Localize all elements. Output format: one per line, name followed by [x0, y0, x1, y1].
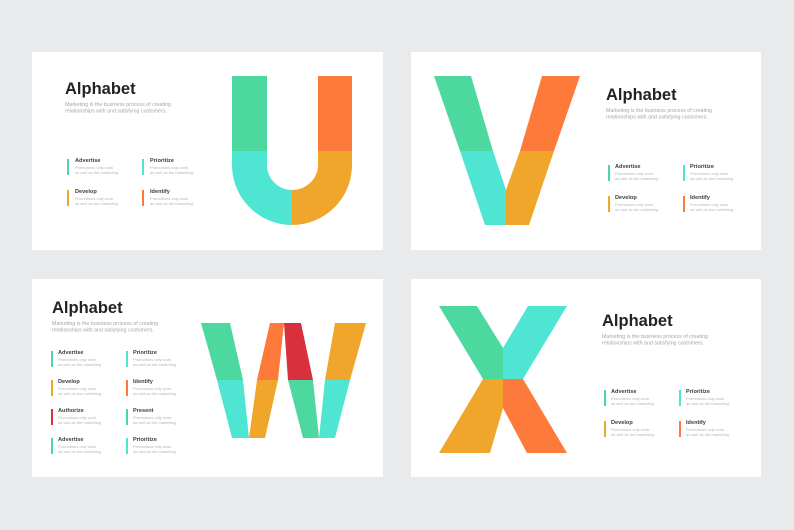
item: Identify: as well as the marketing.	[686, 432, 730, 437]
item: Develop: as well as the marketing.	[611, 432, 655, 437]
item: Prioritize	[142, 158, 194, 175]
item: Advertise: Promotions only work	[615, 171, 653, 176]
letter W	[201, 323, 366, 438]
subtitle: Marketing is the business process of creating	[602, 334, 708, 340]
item: Advertise	[67, 158, 119, 175]
item: Authorize: Authorize	[58, 408, 84, 414]
item: Identify	[142, 189, 194, 206]
item: Prioritize: Promotions only work	[133, 357, 171, 362]
subtitle: Marketing is the business process of creating	[65, 102, 171, 108]
item: Identify: Promotions only work	[133, 386, 171, 391]
item: Authorize	[51, 408, 102, 425]
item: Develop	[604, 420, 655, 437]
item: Develop: Promotions only work	[58, 386, 96, 391]
panel: X slide	[411, 279, 761, 477]
title: Alphabet	[602, 312, 673, 330]
item: Prioritize: as well as the marketing.	[150, 170, 194, 175]
subtitle: relationships with and satisfying customers.	[52, 328, 154, 334]
item: Prioritize: Promotions only work	[150, 165, 188, 170]
item: Present: as well as the marketing.	[133, 420, 177, 425]
subtitle: Marketing is the business process of creating	[52, 321, 158, 327]
item: Identify: Promotions only work	[686, 427, 724, 432]
item: Present	[126, 408, 177, 425]
item: Present: Present	[133, 408, 154, 414]
title: Alphabet	[52, 299, 123, 317]
item: Prioritize: as well as the marketing.	[690, 176, 734, 181]
item: Advertise: Advertise	[611, 389, 636, 395]
item: Develop: Develop	[58, 379, 80, 385]
letter V	[434, 76, 580, 225]
item: Advertise 2	[51, 437, 102, 454]
panel: U slide	[32, 52, 383, 250]
item: Prioritize 2: Prioritize	[133, 437, 157, 443]
item: Prioritize	[679, 389, 730, 406]
item: Develop: Develop	[611, 420, 633, 426]
item: Prioritize: Prioritize	[690, 164, 714, 170]
title: Alphabet	[65, 80, 136, 98]
title: Alphabet	[606, 86, 677, 104]
item: Advertise: Promotions only work	[75, 165, 113, 170]
item: Advertise: Advertise	[615, 164, 640, 170]
subtitle: relationships with and satisfying customers.	[606, 114, 708, 120]
item: Advertise: as well as the marketing.	[615, 176, 659, 181]
item: Identify	[126, 379, 177, 396]
item: Advertise 2: as well as the marketing.	[58, 449, 102, 454]
item: Develop: as well as the marketing.	[58, 391, 102, 396]
item: Advertise: as well as the marketing.	[611, 401, 655, 406]
item: Prioritize: Prioritize	[133, 350, 157, 356]
item: Develop: Develop	[615, 195, 637, 201]
item: Prioritize: Promotions only work	[690, 171, 728, 176]
item: Identify: as well as the marketing.	[690, 207, 734, 212]
item: Identify: Identify	[686, 420, 707, 426]
item: Develop	[608, 195, 659, 212]
item: Identify	[683, 195, 734, 212]
item: Prioritize	[683, 164, 734, 181]
item: Develop: as well as the marketing.	[615, 207, 659, 212]
letter X	[439, 306, 567, 453]
item: Advertise: Promotions only work	[58, 357, 96, 362]
item: Identify: Identify	[133, 379, 154, 385]
item: Authorize: Promotions only work	[58, 415, 96, 420]
item: Develop: Promotions only work	[615, 202, 653, 207]
item: Advertise: as well as the marketing.	[75, 170, 119, 175]
item: Advertise: Advertise	[75, 158, 100, 164]
item: Present: Promotions only work	[133, 415, 171, 420]
item: Identify: Promotions only work	[690, 202, 728, 207]
item: Prioritize 2	[126, 437, 177, 454]
item: Identify: as well as the marketing.	[150, 201, 194, 206]
item: Advertise 2: Promotions only work	[58, 444, 96, 449]
item: Authorize: as well as the marketing.	[58, 420, 102, 425]
item: Develop	[51, 379, 102, 396]
item: Identify: as well as the marketing.	[133, 391, 177, 396]
panel: V slide	[411, 52, 761, 250]
item: Prioritize: Prioritize	[686, 389, 710, 395]
subtitle: Marketing is the business process of creating	[606, 108, 712, 114]
item: Develop: Promotions only work	[611, 427, 649, 432]
item: Advertise: as well as the marketing.	[58, 362, 102, 367]
item: Advertise	[51, 350, 102, 367]
item: Advertise	[608, 164, 659, 181]
item: Prioritize: as well as the marketing.	[133, 362, 177, 367]
letter U	[232, 76, 352, 225]
item: Develop: Develop	[75, 189, 97, 195]
subtitle: relationships with and satisfying customers.	[65, 108, 167, 114]
item: Advertise	[604, 389, 655, 406]
subtitle: relationships with and satisfying customers.	[602, 340, 704, 346]
item: Identify: Identify	[690, 195, 711, 201]
item: Advertise 2: Advertise	[58, 437, 84, 443]
item: Identify: Promotions only work	[150, 196, 188, 201]
item: Prioritize 2: Promotions only work	[133, 444, 171, 449]
item: Advertise: Promotions only work	[611, 396, 649, 401]
item: Develop: Promotions only work	[75, 196, 113, 201]
item: Prioritize	[126, 350, 177, 367]
item: Prioritize: Promotions only work	[686, 396, 724, 401]
panel: W slide	[32, 279, 383, 477]
item: Identify: Identify	[150, 189, 171, 195]
item: Develop	[67, 189, 119, 206]
item: Advertise: Advertise	[58, 350, 84, 356]
item: Prioritize 2: as well as the marketing.	[133, 449, 177, 454]
item: Prioritize: Prioritize	[150, 158, 174, 164]
item: Prioritize: as well as the marketing.	[686, 401, 730, 406]
item: Identify	[679, 420, 730, 437]
item: Develop: as well as the marketing.	[75, 201, 119, 206]
